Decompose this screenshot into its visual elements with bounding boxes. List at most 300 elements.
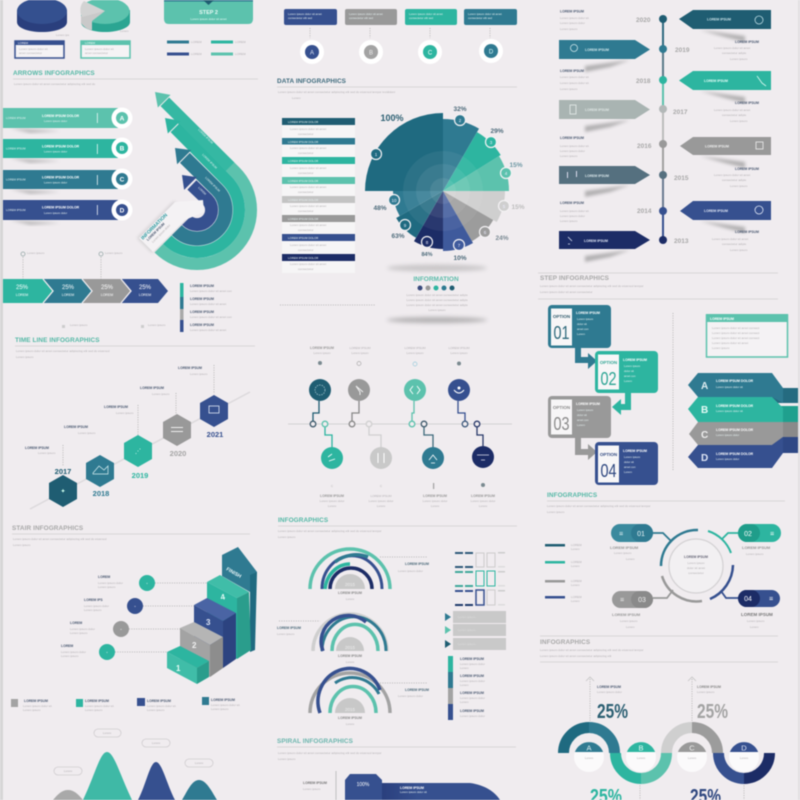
list of labelled bars: consectetur [298,228,314,232]
arch chart 3: LOREM IPSUM [405,688,429,692]
list of labelled bars: consectetur [298,190,314,194]
badge B: Lorem [637,756,646,760]
arrow row 2015: Lorem ipsum dolor sit [560,144,589,148]
arrow row 2014: LOREM IPSUM [704,209,728,213]
arrow bar C [3,168,132,194]
node: bottom light grey [366,421,393,508]
colour legend: Lorem [571,564,580,568]
arrow row 2017: Lorem ipsum [560,87,578,91]
hexagon 2018 [64,425,114,498]
percent 25 top left: LOREM IPSUM [597,685,621,689]
option box A: A [310,50,314,56]
arch chart 3: Lorem [346,722,355,726]
stair callouts: ◦ [120,627,122,633]
arrow row 2014: LOREM IPSUM [735,230,759,234]
chevron row: percentages: Lorem ipsum [70,323,88,327]
grey bars with triangle markers: Lorem ipsum [458,615,476,619]
ribbon arrows ABCD: D [701,453,708,464]
badge A: A [586,744,592,752]
pill 02: LOREM IPSUM [742,545,771,550]
percent 25 top left [597,685,628,723]
badge C [677,742,707,772]
heading: stair: STAIR INFOGRAPHICS [12,525,84,532]
arrow row 2015: LOREM IPSUM [585,174,609,178]
node: top grey: Lorem ipsum [351,351,369,355]
text box: blue outline: LOREM [18,41,29,45]
option 03: LOREM IPSUM [576,402,600,406]
year labels: 2019 [675,47,690,54]
arch chart 1: Lorem [346,597,355,601]
badge D: Lorem [740,756,749,760]
stair legend [11,697,240,712]
chevron row: percentages: Lorem ipsum [105,251,123,255]
stair legend: Lorem ipsum dolor sit [211,703,240,707]
arrow row 2020: LOREM IPSUM [707,18,731,22]
badge C: C [689,744,695,752]
panel: spiral infographics: Lorem ipsum dolor sit amet consectetur adipiscing elit sed do eiusmod tempor [278,751,382,755]
radial pie chart: 3 [490,140,493,145]
percent 25 top right: 25% [697,701,728,723]
percent 25 top right: Lorem ipsum [697,690,715,694]
arrow bar A [3,108,132,133]
chevron row: percentages: LOREM [62,293,74,297]
hexagon 2019 [104,405,152,480]
colour legend: LOREM [571,543,582,547]
label: information tag: Lorem ipsum dolor [151,223,171,244]
pill 02: Lorem ipsum [746,552,764,556]
curved arrows: LOREM IPSUM [201,153,218,170]
option box D: consectetur elit sed [468,16,493,20]
list of labelled bars: LOREM IPSUM DOLOR [288,179,318,183]
icon: teal 3D pie [80,0,130,32]
node: top blue [448,346,470,427]
option 02: LOREM IPSUM [623,358,647,362]
option 04 [595,442,658,485]
heading: timeline: TIME LINE INFOGRAPHICS [15,337,100,344]
arch chart 2: 2015 [345,645,356,650]
list of labelled bars: consectetur [298,132,314,136]
timeline spine [662,19,664,240]
option 04: amet con [624,465,636,469]
option 01: LOREM IPSUM [576,311,600,315]
option 04: LOREM IPSUM [623,449,647,453]
colour legend: Lorem [571,599,580,603]
arrow row 2017: LOREM IPSUM [585,108,609,112]
radial pie chart: 10 [391,198,397,203]
percent labels: 15% [509,162,523,169]
arch chart 3: LOREM IPSUM [338,716,362,720]
colour legend: LOREM [571,595,582,599]
arrow row 2014: Lorem ipsum dolor sit amet [712,237,748,241]
stacked bar legend: Lorem ipsum dolor [460,714,485,718]
panel: stair infographics [11,525,257,800]
pill 04: 04 [744,596,752,603]
hexagon 2017: LOREM IPSUM [25,446,49,450]
spiral band: LOREM IPSUM [303,781,327,785]
arrow bar A: LOREM IPSUM DOLOR [42,114,80,118]
stair legend: Lorem ipsum dolor sit [85,704,114,708]
stair legend: Lorem ipsum [85,708,103,712]
legend: step lines: LOREM [191,40,202,44]
pill 03: Lorem [626,625,635,629]
option 01: dolor sit [577,322,587,326]
stair callouts: Lorem ipsum [98,585,116,589]
stair callouts: LOREM [61,644,73,648]
node: bottom navy: Lorem ipsum dolor [471,499,495,503]
panel: data infographics: Lorem ipsum dolor sit amet consectetur adipiscing elit sed do eiusmod tempor incididunt [278,90,395,94]
ribbon arrows ABCD: Lorem ipsum dolor sit [716,385,743,389]
stacked bar legend: Lorem [460,683,469,687]
arrow row 2018: Lorem ipsum [730,119,748,123]
arrow row 2013: Lorem ipsum dolor [560,214,585,218]
stair callouts: LOREM [98,575,110,579]
arrow row 2017 [559,69,650,132]
list of labelled bars: LOREM IPSUM DOLOR [288,256,318,260]
panel: top-left pie cylinders [15,0,253,58]
stair legend: LOREM IPSUM [211,698,235,702]
node: bottom teal [320,421,344,508]
year labels: 2014 [637,208,652,215]
list of labelled bars: Lorem ipsum dolor sit amet [290,262,326,266]
option box D [464,9,517,63]
stacked bar legend: Lorem [460,700,469,704]
panel: arches infographics: Lorem ipsum [278,535,296,539]
pill 04: LOREM IPSUM [741,612,773,617]
percent 25 top left: 25% [597,701,628,723]
radial pie chart [365,106,525,262]
node: bottom navy [471,421,495,508]
stacked bar legend: Lorem [460,666,469,670]
panel: ring infographics: Lorem ipsum dolor sit amet consectetur adipiscing elit sed do eiusmod tempor [547,504,651,508]
stair callouts: ◦ [134,604,136,610]
radial pie chart: 7 [458,243,461,248]
option 04: 04 [600,461,616,481]
ribbon arrows ABCD: B [701,405,708,416]
node: bottom navy: LOREM IPSUM [471,494,495,498]
hexagon 2017: 2017 [55,467,71,476]
panel: centre node timeline [288,346,512,508]
radial pie chart: 5 [503,204,506,209]
information block [280,264,487,323]
arrow row 2017: Lorem ipsum dolor sit [560,75,589,79]
ribbon arrows ABCD [688,373,798,468]
teal text box: Lorem ipsum dolor sit amet consect [712,331,760,335]
arrow bar B: LOREM IPSUM DOLOR [42,144,80,148]
arrow bar B [3,138,132,163]
node: top dark teal: LOREM IPSUM [310,346,334,350]
hexagon 2018: Lorem ipsum [78,431,96,435]
stair callouts: LOREM [70,621,82,625]
arrow bar B: Lorem ipsum dolor [44,150,67,154]
arch chart 2 [277,614,387,664]
hexagon 2017: ✦ [60,488,66,495]
pill 04: Lorem [750,625,759,629]
list of labelled bars: Lorem ipsum dolor sit amet [290,127,326,131]
arrow row 2015: Lorem ipsum dolor [560,149,585,153]
year labels: 2020 [636,17,651,24]
arrow row 2013: Lorem ipsum [560,219,578,223]
arrow row 2015: LOREM IPSUM [560,136,584,140]
list of labelled bars: Lorem ipsum dolor sit amet [290,146,326,150]
radial pie chart: 2 [459,118,462,123]
hexagon 2017: Lorem ipsum [38,451,56,455]
mountain chart: Lorem [195,761,204,765]
pill 01: Lorem [626,557,635,561]
arch chart 1 [310,549,429,601]
arch chart 2: LOREM IPSUM [277,626,301,630]
percent labels: 10% [453,255,467,262]
panel: top-left pie cylinders: Lorem [120,29,129,33]
card: step 2: Lorem ipsum dolor sit amet [190,17,227,21]
stair legend: LOREM IPSUM [24,699,48,703]
pill 04 [738,590,780,629]
radial pie chart: 8 [426,240,429,245]
list of labelled bars: Lorem ipsum dolor sit amet [290,185,326,189]
wave band [564,728,770,778]
ribbon arrows ABCD: LOREM IPSUM DOLOR [716,404,754,408]
heading: arrows infographics: ARROWS INFOGRAPHICS [13,70,95,77]
arrow row 2019 [559,10,650,72]
panel: step infographics: Lorem ipsum dolor sit amet consectetur [540,290,593,294]
node: bottom dark teal: Lorem ipsum dolor [423,499,447,503]
colour legend [545,543,582,603]
spiral band: LOREM IPSUM [400,786,424,790]
spiral band: 100% [357,782,370,788]
panel: ring infographics: Lorem ipsum [687,561,705,565]
arrow row 2014: Lorem ipsum [730,248,748,252]
arrow row 2018: Lorem ipsum dolor sit amet [714,108,750,112]
pill 03: LOREM IPSUM [612,612,641,617]
legend: coloured bar with labels: Lorem ipsum dolor sit amet con [190,315,232,319]
node: bottom teal: C [331,484,334,488]
option box A: Lorem ipsum dolor sit amet [288,12,322,16]
list of labelled bars: consectetur [298,171,314,175]
arch chart 3 [310,668,429,726]
arch chart 3: Lorem ipsum dolor [398,694,423,698]
arrow row 2019: LOREM IPSUM [560,10,584,14]
panel: timeline infographics [15,337,255,509]
list of labelled bars: LOREM IPSUM DOLOR [288,236,318,240]
ribbon arrows ABCD: Lorem ipsum dolor [716,457,739,461]
badge D: D [741,744,747,752]
arrow row 2017: LOREM IPSUM [560,69,584,73]
year labels: 2015 [674,175,689,182]
list of labelled bars: consectetur [298,267,314,271]
pill 04: ≡ [769,596,773,603]
heading: ring: INFOGRAPHICS [547,492,598,499]
grey bars with triangle markers [445,611,506,650]
node: bottom dark teal: Lorem [431,504,440,508]
arrow bar A: A [120,116,125,122]
isometric stairs: 4 [220,592,226,602]
percent labels: 48% [373,205,387,212]
pill 03 [612,591,653,629]
hexagon 2020 [140,386,191,458]
isometric stairs: 2 [192,641,197,650]
node: top blue: LOREM IPSUM [448,346,470,350]
panel: data infographics: Lorem [292,96,301,100]
option 03: 03 [554,414,570,434]
panel: top-left pie cylinders: Lorem ips [56,33,70,37]
option 02 [595,351,658,393]
option 01: Lorem ipsum [577,317,594,321]
list of labelled bars: LOREM IPSUM DOLOR [288,198,318,202]
arrow bar C: LOREM IPSUM DOLOR [42,176,80,180]
percent labels: 32% [453,106,467,113]
panel: ring infographics: LOREM IPSUM [684,555,708,559]
hexagon 2020: LOREM IPSUM [140,386,164,390]
arrow row 2016: consectetur adipis [722,178,747,182]
panel: wave infographics: Lorem ipsum dolor sit amet consectetur adipiscing elit sed do eiusmod tempor [540,648,644,652]
arrow row 2018 [679,71,771,123]
teal text box: Lorem ipsum [712,346,730,350]
arrow row 2020: Lorem ipsum [730,57,748,61]
arrow row 2016: Lorem ipsum dolor sit amet [714,173,750,177]
heading: step: STEP INFOGRAPHICS [540,275,610,282]
information block: Lorem ipsum dolor sit amet consectetur adipis [406,303,468,307]
legend: step lines [167,40,246,56]
stacked bar legend: LOREM IPSUM [460,691,484,695]
panel: data infographics [277,78,525,323]
option box C: consectetur elit sed [409,16,434,20]
arrow row 2013: Lorem ipsum dolor sit [560,209,589,213]
stair legend: LOREM IPSUM [147,699,171,703]
stair callouts: Lorem ipsum dolor [98,581,123,585]
spiral band: Lorem ipsum [303,787,321,791]
arrow row 2015: Lorem ipsum [560,154,578,158]
stair legend: Lorem ipsum [211,707,229,711]
teal text box: Lorem ipsum dolor sit amet consect [712,336,760,340]
node: top dark teal [309,346,334,427]
arrow row 2018: LOREM IPSUM [735,101,759,105]
text box: teal outline [81,41,130,58]
option 02: Lorem [624,379,633,383]
arrow row 2016: LOREM IPSUM [735,167,759,171]
hexagon 2019: Lorem ipsum [116,411,134,415]
label: information tag: LOREM IPSUM [146,222,166,242]
pill 03: ≡ [620,597,624,604]
pill 01: 01 [637,531,645,538]
panel: spiral infographics [277,738,516,800]
arch chart 1: LOREM IPSUM [405,562,429,566]
pill 01 [610,524,653,561]
option 04: Lorem [624,470,633,474]
percent labels: 63% [391,233,405,240]
pill 04: Lorem ipsum [747,619,765,623]
badge D [729,742,759,772]
panel: timeline infographics: Lorem ipsum [16,355,34,359]
information block: Lorem ipsum dolor sit amet consectetur adipis [406,293,468,297]
arrow bar D [3,200,132,225]
hexagon 2019: LOREM IPSUM [104,405,128,409]
list of labelled bars: LOREM IPSUM DOLOR [288,120,318,124]
text box: blue outline: Lorem ipsum dolor sit [19,47,48,51]
option box D: D [489,50,494,56]
arrow row 2020: LOREM IPSUM [735,40,759,44]
arrow row 2015 [559,136,650,197]
option 02: Lorem ipsum [624,364,641,368]
stair callouts: Lorem ipsum [84,608,102,612]
list of labelled bars: consectetur [298,209,314,213]
node: bottom dark teal: LOREM IPSUM [423,494,447,498]
option 03: OPTION [553,405,570,410]
hexagon 2019: 2019 [132,471,148,480]
option 04: dolor sit [624,460,634,464]
information block: INFORMATION [413,276,459,283]
option box D: Lorem ipsum dolor sit amet [468,12,502,16]
arch chart 1: Lorem ipsum dolor [398,569,423,573]
badge A [574,742,604,772]
option box C: Lorem ipsum dolor sit amet [409,12,443,16]
hexagon 2021 [178,365,228,439]
pill 02: ≡ [770,531,774,538]
legend: coloured bar with labels: Lorem ipsum dolor sit amet con [190,289,232,293]
option 01 [548,305,611,348]
label: information tag: INFORMATION [140,212,169,241]
panel: ring infographics [545,492,785,629]
panel: arches infographics: Lorem ipsum dolor sit amet consectetur adipiscing elit sed do eiusmod tempor [278,529,382,533]
stair callouts: Lorem ipsum [70,631,88,635]
option 01: 01 [554,323,570,343]
panel: ring infographics: Lorem ipsum [547,510,565,514]
arrow row 2016: LOREM IPSUM [705,144,729,148]
option 03: Lorem ipsum [577,408,594,412]
hexagon 2021: LOREM IPSUM [178,366,202,370]
isometric stairs [167,547,257,684]
curved arrows: LOREM IPSUM [204,176,221,193]
hexagon 2017 [25,445,77,507]
option box C: C [428,50,433,56]
node: bottom light grey: Lorem ipsum dolor [369,499,393,503]
heading: spiral: SPIRAL INFOGRAPHICS [277,738,354,745]
stacked bar legend: Lorem ipsum dolor [460,679,485,683]
option 03: amet con [577,418,589,422]
teal text box [706,314,788,357]
chevron row: percentages: Lorem ipsum [148,323,166,327]
stair callouts: Lorem ipsum [61,654,79,658]
option 02: 02 [600,369,616,389]
option 02: OPTION [600,360,617,365]
option 03: Lorem [577,423,586,427]
list of labelled bars: LOREM IPSUM DOLOR [288,140,318,144]
grey bars with triangle markers: Lorem ipsum [458,642,476,646]
option 01: Lorem [577,332,586,336]
node: bottom dark teal [421,421,447,508]
node: bottom light grey: C [380,484,383,488]
badge B [626,742,656,772]
stacked bar legend: Lorem ipsum dolor [460,696,485,700]
percent labels: 100% [380,113,404,123]
curved arrows: LOREM IPSUM [197,128,214,145]
percent labels: 84% [421,252,433,258]
numbered markers [370,114,512,250]
radial pie chart: 4 [505,171,508,176]
hexagon 2019: ⋰ [135,449,141,455]
ribbon arrows ABCD: Lorem ipsum dolor [716,433,739,437]
legend: step lines: LOREM [235,52,246,56]
arrow bar D: LOREM IPSUM [6,208,26,212]
arrow row 2013: LOREM IPSUM [560,201,584,205]
pill 02 [738,524,781,556]
arch chart 1: 2015 [345,582,356,587]
option box B [345,9,397,64]
ring diagram [653,530,738,601]
curved arrows: LOREM [197,186,208,196]
hexagon 2021: Lorem ipsum [190,372,208,376]
arrow row 2019: Lorem ipsum [560,27,578,31]
arrow row 2018: LOREM IPSUM [704,79,728,83]
text box: blue outline: amet consectetur [19,51,42,55]
